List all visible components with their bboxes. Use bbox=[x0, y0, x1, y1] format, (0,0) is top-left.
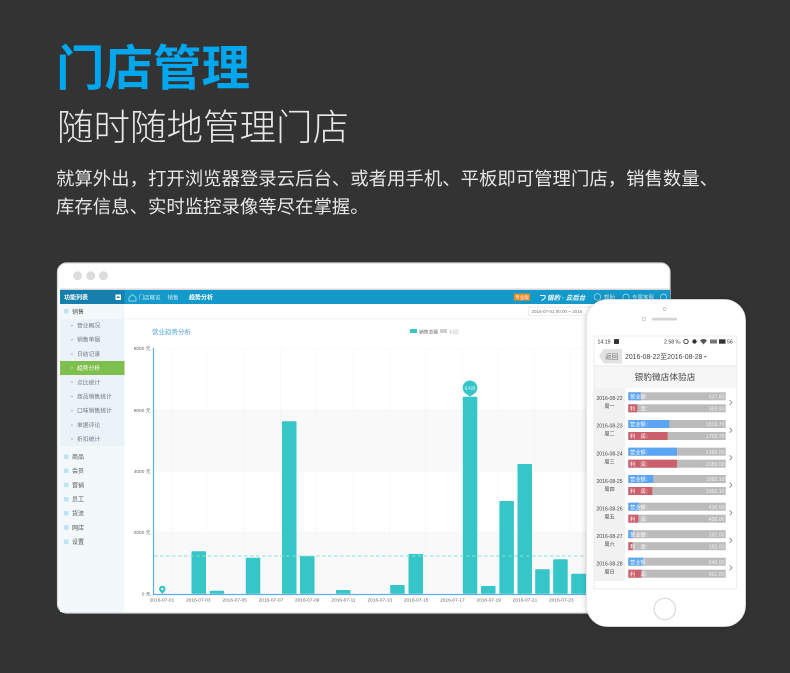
revenue and profit bars: 1753.70 bbox=[706, 434, 725, 440]
sidebar menu bbox=[60, 304, 124, 612]
date column: 2016-08-24 bbox=[596, 451, 623, 457]
bar chart: sales trend: 0 元 bbox=[142, 592, 151, 598]
navigation row bbox=[599, 349, 706, 364]
bar chart: sales trend: 2016-07-03 bbox=[186, 598, 211, 604]
sidebar menu: 销售 bbox=[72, 308, 84, 316]
revenue and profit bars: 利 润： bbox=[630, 542, 651, 550]
sidebar menu: 趋势分析 bbox=[77, 364, 100, 372]
date column: 周一 bbox=[604, 404, 615, 410]
sidebar menu: 货流 bbox=[72, 510, 84, 518]
revenue and profit bars: 利 润： bbox=[630, 515, 651, 523]
store name: 银豹微店体验店 bbox=[635, 371, 696, 382]
title: 门店管理 bbox=[56, 42, 250, 96]
max value marker bbox=[463, 380, 477, 397]
sidebar menu: 销售单据 bbox=[77, 336, 100, 344]
revenue and profit bars: 营业额： bbox=[630, 530, 651, 538]
bar chart: sales trend: 6000 元 bbox=[134, 408, 151, 414]
revenue and profit bars: 营业额： bbox=[630, 392, 651, 400]
bar chart: sales trend: 2016-07-07 bbox=[259, 598, 283, 604]
sidebar menu: 员工 bbox=[72, 496, 84, 504]
top navigation bar: 趋势分析 bbox=[189, 294, 213, 302]
sidebar menu: 会员 bbox=[72, 467, 84, 475]
revenue and profit bars: 1819.70 bbox=[706, 422, 725, 428]
bar chart: sales trend: 2016-07-09 bbox=[295, 598, 320, 604]
revenue and profit bars: 640.00 bbox=[709, 560, 725, 566]
revenue and profit bars: 551.00 bbox=[709, 572, 725, 578]
sidebar menu: 单据评论 bbox=[77, 421, 100, 429]
date column: 周日 bbox=[604, 570, 615, 576]
bar chart: sales trend: 2016-07-23 bbox=[549, 598, 574, 604]
description text: 就算外出，打开浏览器登录云后台、或者用手机、平板即可管理门店，销售数量、 bbox=[56, 168, 718, 189]
revenue and profit bars: 营业额： bbox=[630, 475, 651, 483]
bar chart: sales trend: 2016-07-05 bbox=[222, 598, 247, 604]
date column bbox=[594, 388, 625, 581]
bar chart: sales trend: 4000 元 bbox=[134, 469, 151, 475]
bar chart: sales trend: 2016-07-21 bbox=[513, 598, 538, 604]
bar chart: sales trend: 2000 元 bbox=[134, 530, 151, 536]
top navigation bar: 门店概览 bbox=[138, 294, 161, 302]
chart legend bbox=[410, 328, 459, 336]
status bar: 2.58 ‰ bbox=[664, 340, 682, 346]
revenue and profit bars: 182.00 bbox=[709, 544, 725, 550]
panel: browser window bbox=[58, 263, 670, 613]
revenue and profit bars: 利 润： bbox=[630, 432, 651, 440]
bar chart: sales trend: 2016-07-01 bbox=[150, 598, 175, 604]
row arrows bbox=[730, 400, 732, 570]
panel: phone bbox=[586, 300, 746, 626]
description text bbox=[56, 168, 718, 217]
revenue and profit bars: 利 润： bbox=[630, 460, 651, 468]
date column: 2016-08-28 bbox=[596, 562, 623, 568]
bar chart: sales trend: 2016-07-19 bbox=[476, 598, 501, 604]
revenue and profit bars: 利 润： bbox=[630, 404, 651, 412]
bar chart: sales trend bbox=[134, 346, 586, 604]
revenue and profit bars: 营业额： bbox=[630, 448, 651, 456]
status bar bbox=[598, 339, 733, 346]
revenue and profit bars: 利 润： bbox=[630, 570, 651, 578]
bar chart: sales trend: 2016-07-13 bbox=[368, 598, 392, 604]
sidebar menu: 营销 bbox=[72, 481, 84, 489]
bar chart: sales trend: 2016-07-15 bbox=[404, 598, 429, 604]
date range filter bbox=[125, 307, 670, 319]
sidebar menu: 口味销售统计 bbox=[77, 407, 112, 415]
date column: 周五 bbox=[604, 514, 615, 520]
date column: 周二 bbox=[604, 432, 615, 438]
window control dots bbox=[73, 271, 108, 280]
revenue and profit bars: 2189.00 bbox=[706, 462, 725, 468]
min value marker bbox=[159, 586, 166, 594]
navigation row: 返回 bbox=[605, 353, 619, 361]
chart legend: 利润 bbox=[449, 328, 459, 336]
date column: 2016-08-26 bbox=[596, 506, 623, 512]
sidebar menu: 商品 bbox=[72, 453, 84, 461]
revenue and profit bars: 营业额： bbox=[630, 420, 651, 428]
top navigation bar: 银豹 · 云后台 bbox=[547, 294, 586, 302]
revenue and profit bars: 537.80 bbox=[709, 394, 725, 400]
subtitle: 随时随地管理门店 bbox=[57, 107, 349, 148]
status bar: 14:19 bbox=[598, 340, 611, 346]
phone screen bbox=[594, 336, 737, 589]
status bar: 56 bbox=[727, 340, 733, 346]
revenue and profit bars: 1065.10 bbox=[706, 489, 725, 495]
date column: 2016-08-22 bbox=[596, 396, 623, 402]
date column: 周四 bbox=[604, 487, 615, 493]
description text: 库存信息、实时监控录像等尽在掌握。 bbox=[56, 196, 369, 217]
date column: 2016-08-23 bbox=[596, 424, 623, 430]
navigation row: 2016-08-22至2016-08-28 bbox=[625, 353, 703, 361]
sidebar menu: 网店 bbox=[72, 524, 84, 532]
sidebar menu: 折扣统计 bbox=[77, 435, 100, 443]
sidebar menu: 营业概况 bbox=[77, 322, 100, 330]
top navigation bar: 专属客服 bbox=[632, 294, 655, 302]
revenue and profit bars: 1093.10 bbox=[706, 477, 725, 483]
date column: 周三 bbox=[604, 459, 615, 465]
bar chart: sales trend: 8000 元 bbox=[134, 346, 151, 352]
chart heading: 营业趋势分析 bbox=[152, 327, 192, 336]
revenue and profit bars bbox=[628, 392, 726, 578]
icon: phone camera and speaker bbox=[642, 308, 677, 321]
revenue and profit bars: 182.00 bbox=[709, 532, 725, 538]
sidebar menu: 商品销售统计 bbox=[77, 392, 112, 400]
revenue and profit bars: 369.80 bbox=[709, 406, 725, 412]
bar chart: sales trend: 2016-07-11 bbox=[331, 598, 356, 604]
chart legend: 销售总额 bbox=[419, 328, 438, 336]
top navigation bar bbox=[60, 290, 670, 304]
sidebar menu: 设置 bbox=[72, 538, 84, 546]
icon: home button bbox=[654, 598, 676, 620]
top navigation bar: 销售 bbox=[168, 294, 179, 302]
revenue and profit bars: 438.00 bbox=[709, 505, 725, 511]
sidebar menu: 日结记录 bbox=[77, 350, 100, 358]
date range filter: 2016-07-01 00:00 ~ 2016 bbox=[532, 309, 583, 314]
top navigation bar: 帮助 bbox=[604, 294, 616, 302]
revenue and profit bars: 2189.00 bbox=[706, 450, 725, 456]
date column: 周六 bbox=[604, 541, 615, 548]
revenue and profit bars: 营业额： bbox=[630, 558, 651, 566]
store name bbox=[594, 366, 736, 388]
date column: 2016-08-25 bbox=[596, 479, 623, 485]
date column: 2016-08-27 bbox=[596, 534, 623, 540]
top navigation bar: 专业版 bbox=[515, 294, 529, 301]
revenue and profit bars: 营业额： bbox=[630, 503, 651, 511]
bar chart: sales trend: 2016-07-17 bbox=[440, 598, 465, 604]
sidebar menu: 点比统计 bbox=[77, 378, 100, 386]
max value marker: 6,429 bbox=[465, 386, 476, 390]
revenue and profit bars: 利 润： bbox=[630, 487, 651, 495]
revenue and profit bars: 436.00 bbox=[709, 517, 725, 523]
top navigation bar: 功能列表 bbox=[64, 294, 88, 302]
